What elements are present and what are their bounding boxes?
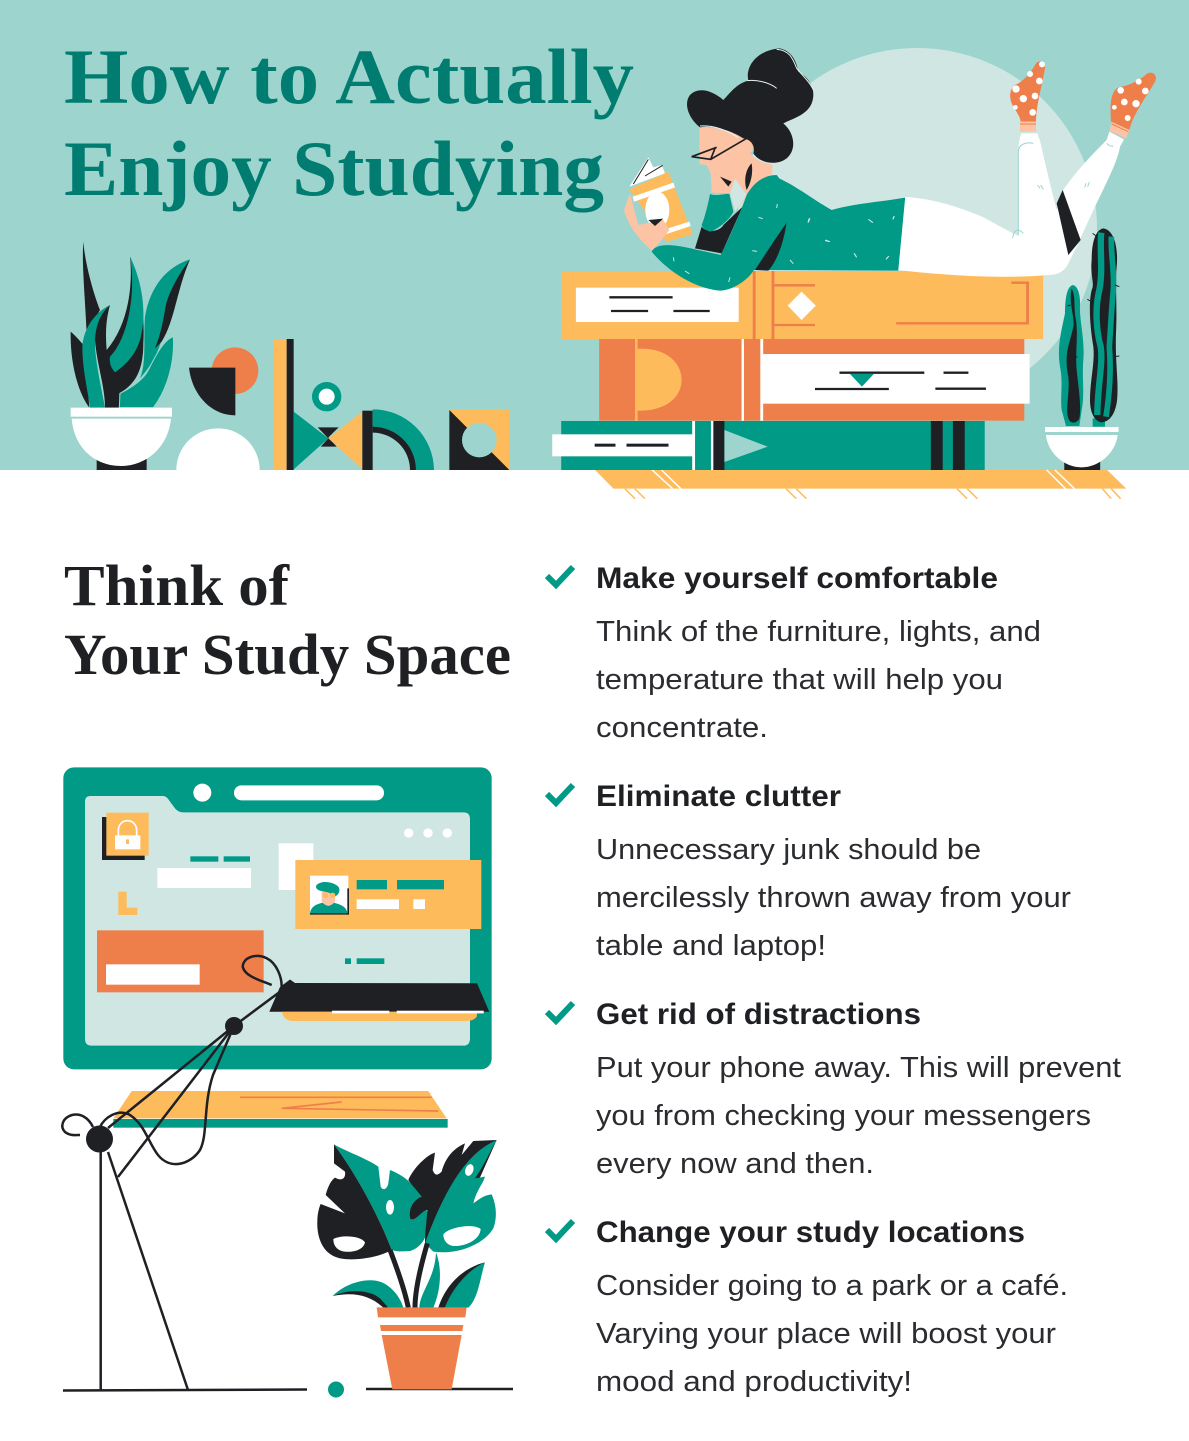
title: [64, 33, 634, 212]
front arm sleeve: [652, 175, 830, 291]
tip 2: eliminate clutter: mercilessly thrown away from your: [596, 882, 1071, 914]
illustration: geometric shapes: [176, 339, 510, 470]
illustration: computer monitor: [63, 767, 492, 1069]
icon: check mark: [547, 567, 573, 585]
book held in hand: [624, 157, 693, 251]
section heading: Your Study Space: [64, 622, 511, 687]
illustration: monstera plant in orange pot: [317, 1140, 497, 1389]
rug: [595, 470, 1126, 499]
face and neck: [699, 127, 773, 212]
pale background circle: [737, 48, 1097, 408]
tip 4: change your study locations: Consider going to a park or a café.: [596, 1270, 1068, 1302]
tip 2: eliminate clutter: [547, 780, 1071, 962]
section heading: Think of: [64, 553, 290, 618]
tip 2: eliminate clutter: table and laptop!: [596, 930, 826, 962]
raised arm and dark shirt: [695, 194, 743, 253]
tip 3: get rid of distractions: you from checking your messengers: [596, 1100, 1091, 1132]
tip 1: make yourself comfortable: concentrate.: [596, 712, 768, 744]
orange panel: [97, 930, 264, 992]
trousers: [898, 132, 1124, 277]
tip 4: change your study locations: Varying your place will boost your: [596, 1318, 1056, 1350]
illustration: woman's sweater body: [752, 177, 905, 271]
floor dot: [328, 1382, 344, 1398]
tip 2: eliminate clutter: Unnecessary junk should be: [596, 834, 981, 866]
tip 2: eliminate clutter: Eliminate clutter: [596, 780, 841, 813]
orange book: [599, 339, 1030, 421]
illustration: stack of books: [552, 271, 1126, 499]
illustration: woman's legs, trousers and socks: [898, 61, 1156, 277]
sock, left foot: [1010, 61, 1045, 132]
icon: check mark: [547, 1003, 573, 1021]
profile card: [295, 860, 481, 929]
tip 4: change your study locations: [547, 1216, 1068, 1398]
illustration: woman's head, arms and book: [624, 48, 830, 291]
earring, mouth and neck gap: [720, 163, 752, 212]
tip 3: get rid of distractions: [547, 998, 1121, 1180]
hair: [687, 48, 813, 163]
tip 3: get rid of distractions: every now and then.: [596, 1148, 874, 1180]
tip 1: make yourself comfortable: temperature that will help you: [596, 664, 1003, 696]
floor line: [63, 1389, 513, 1390]
tip 1: make yourself comfortable: Make yourself comfortable: [596, 562, 998, 595]
illustration: desk: [113, 1091, 448, 1128]
illustration: potted snake plant: [71, 242, 190, 470]
sweater fold: [755, 222, 787, 271]
tip 4: change your study locations: mood and productivity!: [596, 1366, 912, 1398]
glasses: [692, 138, 747, 159]
illustration: cacti in white pot: [1045, 228, 1119, 470]
sock, right foot: [1109, 73, 1156, 138]
hair highlights: [700, 49, 813, 138]
teal book: [552, 421, 985, 470]
illustration: desk lamp: [62, 956, 489, 1390]
header banner background: [0, 0, 1189, 470]
title: How to Actually: [64, 33, 634, 120]
yellow book: [561, 271, 1043, 339]
tip 4: change your study locations: Change your study locations: [596, 1216, 1025, 1249]
tip 3: get rid of distractions: Put your phone away. This will prevent: [596, 1052, 1121, 1084]
title: Enjoy Studying: [64, 125, 604, 212]
section heading: [64, 553, 511, 687]
tip 1: make yourself comfortable: [547, 562, 1041, 744]
tip 3: get rid of distractions: Get rid of distractions: [596, 998, 921, 1031]
icon: check mark: [547, 785, 573, 803]
icon: check mark: [547, 1221, 573, 1239]
tip 1: make yourself comfortable: Think of the furniture, lights, and: [596, 616, 1041, 648]
icon: padlock: [102, 813, 149, 860]
